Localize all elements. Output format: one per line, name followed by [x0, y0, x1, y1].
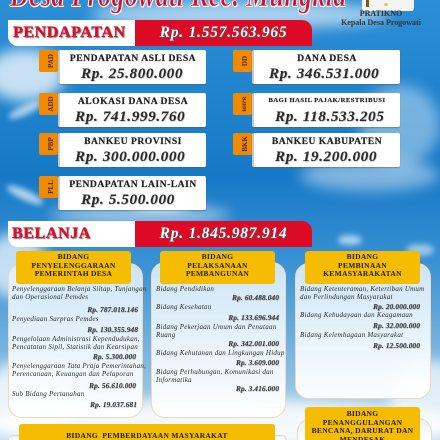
card: bankeu kabupaten	[252, 133, 400, 167]
panel: pemberdayaan masyarakat	[8, 435, 287, 440]
banner label: pendapatan	[8, 20, 135, 46]
header: penyelenggaraan pemerintah desa: PEMERINTAH DESA	[35, 269, 112, 278]
caption: village head name: Kepala Desa Progowati	[341, 18, 421, 27]
tag: ADD	[39, 93, 58, 115]
header: pelaksanaan pembangunan	[160, 251, 275, 284]
item list: pembinaan: Rp. 32.000.000	[373, 321, 420, 330]
tag: PLL	[39, 176, 58, 198]
card: dana desa: Rp. 346.531.000	[269, 65, 379, 82]
banner label: belanja	[8, 221, 135, 247]
header: pembinaan kemasyarakatan: BIDANG	[347, 252, 378, 261]
card: dana desa	[252, 50, 400, 84]
item list: pelaksanaan: Ruang	[156, 331, 176, 339]
card: bankeu provinsi: BANKEU PROVINSI	[84, 136, 182, 147]
banner total: belanja	[135, 221, 312, 247]
tag: PBP	[39, 133, 58, 155]
item list: penyelenggaraan: Pengelolaan Administrasi Kependudukan,	[12, 335, 140, 343]
header: penanggulangan bencana: PENANGGULANGAN	[323, 418, 402, 427]
item list: penyelenggaraan: Rp. 56.610.000	[89, 381, 136, 390]
item list: pelaksanaan: Bidang Pekerjaan Umum dan Penataan	[156, 323, 276, 331]
card: dana desa: DANA DESA	[297, 53, 357, 64]
tag: DD	[233, 50, 252, 72]
header: pembinaan kemasyarakatan	[305, 251, 420, 284]
card: pendapatan asli desa: Rp. 25.800.000	[81, 65, 183, 82]
item list: penyelenggaraan: Rp. 130.355.948	[87, 325, 138, 334]
item list: pelaksanaan: Rp. 60.488.040	[232, 293, 279, 302]
item list: pelaksanaan: Rp. 3.609.000	[236, 358, 279, 367]
header: pelaksanaan pembangunan: BIDANG	[202, 252, 233, 261]
item list: pembinaan: Rp. 20.000.000	[373, 302, 420, 311]
tag: BHPR: BHPR	[242, 96, 248, 112]
banner: belanja	[8, 221, 312, 418]
card: pendapatan asli desa	[58, 50, 206, 84]
card: bagi hasil pajak: Rp. 118.533.205	[275, 108, 384, 125]
header: penyelenggaraan pemerintah desa	[16, 251, 131, 284]
header: pembinaan kemasyarakatan: PEMBINAAN	[338, 261, 387, 270]
header: pembinaan kemasyarakatan: KEMASYARAKATAN	[323, 269, 402, 278]
item list: penyelenggaraan: Rp. 19.037.681	[90, 400, 137, 409]
header: penanggulangan bencana: BIDANG	[347, 409, 378, 418]
card: bankeu provinsi: Rp. 300.000.000	[75, 148, 185, 165]
panel: pembinaan kemasyarakatan	[295, 263, 431, 399]
item list: pembinaan: dan Perlindungan Masyarakat	[300, 293, 393, 301]
header: pelaksanaan pembangunan: PELAKSANAAN	[187, 261, 248, 270]
item list: pembinaan: Bidang Kebudayaan dan Keagamaan	[300, 311, 413, 319]
item list: pelaksanaan: Rp. 342.001.000	[228, 339, 279, 348]
card: pendapatan lain-lain	[58, 176, 206, 210]
banner total: pendapatan	[135, 20, 312, 46]
item list: penyelenggaraan: Rp. 5.300.000	[93, 352, 136, 361]
header: pelaksanaan pembangunan: PEMBANGUNAN	[186, 269, 249, 278]
card: bankeu provinsi	[58, 133, 206, 167]
header: penanggulangan bencana: BENCANA, DARURAT DAN	[312, 426, 413, 435]
item list: pelaksanaan: Bidang Kehutanan dan Lingkungan Hidup	[156, 349, 285, 357]
item list: pelaksanaan: Bidang Kesehatan	[156, 303, 212, 311]
item list: penyelenggaraan	[12, 285, 147, 410]
header: penyelenggaraan pemerintah desa: PENYELENGGARAAN	[31, 261, 116, 270]
tag: BKK: BKK	[241, 136, 249, 152]
banner label: belanja: BELANJA	[12, 225, 91, 242]
banner total: pendapatan: Rp. 1.557.563.965	[160, 24, 287, 41]
card: alokasi dana desa: Rp. 741.999.760	[75, 108, 185, 125]
tag: PLL: PLL	[47, 180, 55, 194]
tag: ADD: ADD	[47, 96, 55, 112]
item list: penyelenggaraan: Pencatatan Sipil, Statistik dan Kearsipan	[12, 343, 138, 351]
card: bagi hasil pajak: BAGI HASIL PAJAK/RESTRIBUSI	[268, 97, 386, 104]
item list: pelaksanaan: Bidang Pendidikan	[156, 285, 214, 293]
header: pemberdayaan masyarakat: BIDANG PEMBERDAYAAN MASYARAKAT	[66, 431, 228, 440]
card: bankeu kabupaten: BANKEU KABUPATEN	[272, 136, 382, 147]
card: pendapatan lain-lain: PENDAPATAN LAIN-LAIN	[69, 179, 197, 190]
card: pendapatan asli desa: PENDAPATAN ASLI DESA	[70, 53, 196, 64]
panel: penyelenggaraan pemerintah desa	[8, 263, 143, 418]
panel: pelaksanaan pembangunan	[151, 262, 286, 418]
item list: penyelenggaraan: Rp. 787.018.146	[87, 305, 138, 314]
tag: PAD	[39, 50, 58, 72]
banner label: pendapatan: PENDAPATAN	[13, 24, 126, 41]
item list: pelaksanaan: Rp. 133.696.944	[228, 313, 279, 322]
tag: PAD: PAD	[47, 54, 55, 68]
tag: PBP: PBP	[47, 137, 55, 151]
caption: village head name	[341, 9, 421, 27]
header: pemberdayaan masyarakat	[19, 424, 275, 440]
item list: pembinaan: Rp. 12.500.000	[373, 341, 420, 350]
item list: pembinaan	[300, 285, 424, 350]
item list: penyelenggaraan: Sub Bidang Pertanahan	[12, 390, 85, 398]
tag: BKK	[233, 133, 252, 155]
card: pendapatan lain-lain: Rp. 5.500.000	[81, 191, 175, 208]
header: penyelenggaraan pemerintah desa: BIDANG	[58, 252, 89, 261]
card: alokasi dana desa: ALOKASI DANA DESA	[78, 96, 188, 107]
item list: pelaksanaan	[156, 285, 285, 394]
item list: pelaksanaan: Rp. 3.416.000	[236, 384, 279, 393]
item list: pembinaan: Bidang Ketenteraman, Ketertiban Umum	[300, 285, 424, 293]
banner: pendapatan	[8, 20, 312, 46]
banner total: belanja: Rp. 1.845.987.914	[160, 225, 287, 242]
item list: penyelenggaraan: Perencanaan, Keuangan dan Pelaporan	[12, 370, 134, 378]
item list: penyelenggaraan: Penyelenggaraan Tata Praja Pemerintahan,	[12, 362, 146, 370]
photo: village head	[362, 0, 414, 11]
card: bankeu kabupaten: Rp. 19.200.000	[275, 148, 377, 165]
card: alokasi dana desa	[58, 93, 206, 127]
item list: penyelenggaraan: dan Operasional Pemdes	[12, 293, 88, 301]
caption: village head name: PRATIKNO	[360, 9, 402, 18]
item list: penyelenggaraan: Penyediaan Sarpras Pemdes	[12, 315, 99, 323]
item list: pelaksanaan: Informatika	[156, 376, 192, 384]
tag: BHPR	[233, 93, 252, 115]
card: bagi hasil pajak	[252, 93, 400, 127]
item list: penyelenggaraan: Penyelenggaraan Belanja Siltap, Tunjangan	[12, 285, 147, 293]
panel: penanggulangan bencana	[297, 418, 432, 440]
item list: pembinaan: Bidang Kelembagaan Masyarakat	[300, 331, 403, 339]
item list: pelaksanaan: Bidang Perhubungan, Komunikasi dan	[156, 368, 274, 376]
header: penanggulangan bencana	[305, 407, 420, 440]
tag: DD: DD	[241, 56, 249, 66]
